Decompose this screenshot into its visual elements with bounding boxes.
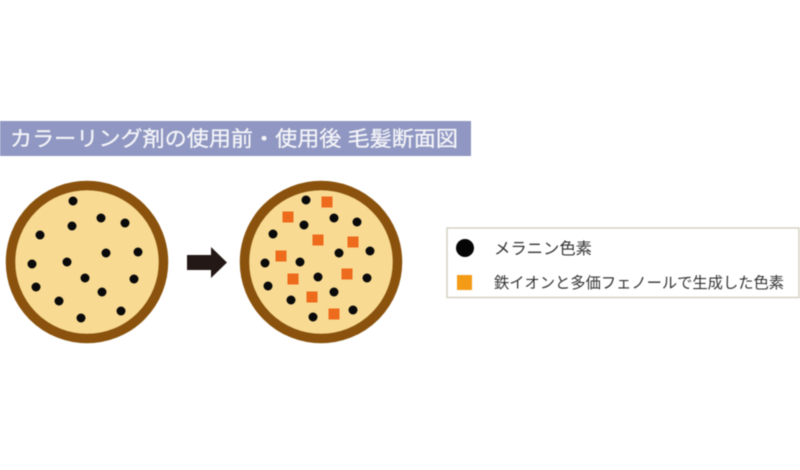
- legend: [447, 228, 799, 298]
- panel: hair cross-section before use: [10, 186, 164, 338]
- arrow: before to after: [187, 247, 227, 278]
- icon: orange square: [457, 275, 472, 290]
- legend label: melanin: メラニン色素: [494, 240, 592, 258]
- icon: melanin dot: [456, 239, 474, 257]
- title banner: [0, 121, 471, 156]
- panel: hair cross-section after use: [244, 186, 398, 338]
- title banner: カラーリング剤の使用前・使用後 毛髪断面図: [10, 128, 458, 151]
- legend label: new pigment: 鉄イオンと多価フェノールで生成した色素: [494, 274, 784, 292]
